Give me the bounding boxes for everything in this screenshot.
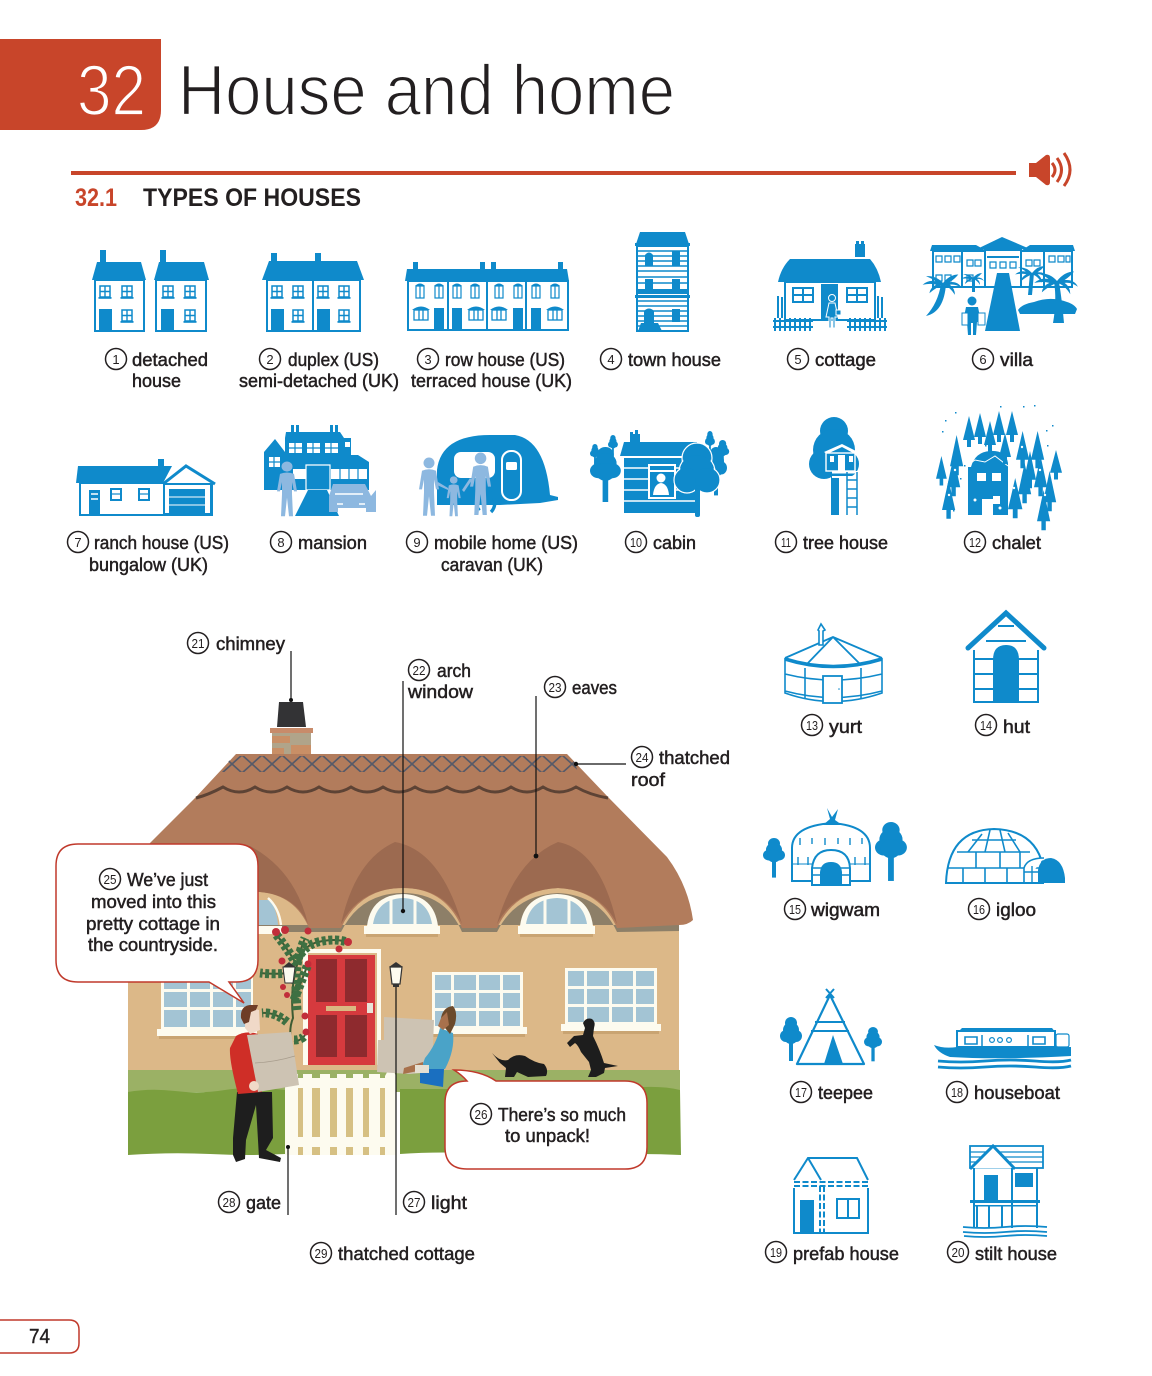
label 12: chalet <box>992 532 1041 553</box>
label 27: light <box>431 1192 467 1213</box>
label 23: 23 <box>548 680 562 695</box>
speech bubble 25: We’ve just <box>127 869 208 890</box>
label 11: tree house <box>803 532 888 553</box>
title: House and home <box>178 52 675 131</box>
label 24: thatched <box>659 747 730 768</box>
icon: stilt house <box>963 1146 1047 1237</box>
label 9: 9 <box>413 535 421 550</box>
label 7 <box>68 532 229 575</box>
speech bubble 25: 25 <box>104 872 116 887</box>
speech bubble 25: pretty cottage in <box>86 913 220 934</box>
label 14: hut <box>1003 716 1030 737</box>
section rule <box>71 171 1016 175</box>
label 11: 11 <box>781 535 791 550</box>
icon: prefab house <box>794 1158 868 1233</box>
label 19: prefab house <box>793 1243 899 1264</box>
label 2: 2 <box>266 352 274 367</box>
label 5: 5 <box>794 352 802 367</box>
label 1: detached <box>132 349 208 370</box>
label 20 <box>948 1242 1057 1264</box>
label 6: villa <box>1000 349 1034 370</box>
label 4: 4 <box>607 352 615 367</box>
icon: wigwam <box>763 808 907 885</box>
speech bubble 25: moved into this <box>91 891 216 912</box>
label 5: cottage <box>815 349 876 370</box>
label 29: thatched cottage <box>338 1243 475 1264</box>
label 17: 17 <box>795 1085 807 1100</box>
label 22: window <box>407 681 474 702</box>
man carrying box <box>230 1005 299 1162</box>
label 10: cabin <box>653 532 696 553</box>
label 1: house <box>132 370 181 391</box>
label 21 <box>188 632 286 654</box>
label 2 <box>239 348 399 391</box>
icon: mansion <box>264 425 376 516</box>
section heading: 32.1 <box>75 184 117 212</box>
icon: row house <box>405 262 569 331</box>
gate <box>285 1065 396 1155</box>
label 13: 13 <box>806 718 818 733</box>
icon: speaker <box>1029 153 1070 186</box>
label 20: stilt house <box>975 1243 1057 1264</box>
lamp right <box>389 962 403 987</box>
speech bubble 26: 26 <box>474 1107 488 1122</box>
label 20: 20 <box>952 1245 964 1260</box>
label 10 <box>626 532 696 553</box>
label 22: 22 <box>412 663 426 678</box>
label 5 <box>788 348 876 370</box>
chapter number tab <box>0 39 161 131</box>
icon: mobile home <box>419 435 558 516</box>
label 16 <box>968 898 1036 920</box>
label 24: 24 <box>636 750 648 765</box>
chapter number tab: 32 <box>77 52 146 131</box>
speech bubble 25: the countryside. <box>88 934 218 955</box>
label 16: 16 <box>973 902 985 917</box>
label 1 <box>106 348 208 391</box>
label 6 <box>972 348 1034 370</box>
label 3: row house (US) <box>445 349 565 370</box>
label 29: 29 <box>314 1246 328 1261</box>
label 1: 1 <box>112 352 120 367</box>
label 6: 6 <box>979 352 987 367</box>
section heading: TYPES OF HOUSES <box>143 184 361 212</box>
label 15: 15 <box>789 902 801 917</box>
speech bubble 26 <box>445 1070 647 1169</box>
speech bubble 25 <box>56 844 258 1003</box>
label 14 <box>976 714 1030 737</box>
label 24 <box>631 746 730 790</box>
label 7: 7 <box>74 535 82 550</box>
label 23: eaves <box>572 677 617 698</box>
label 17 <box>790 1082 873 1103</box>
icon: yurt <box>785 624 882 703</box>
label 15 <box>784 898 880 920</box>
label 21: 21 <box>192 636 204 651</box>
label 28 <box>218 1192 281 1213</box>
label 3: 3 <box>424 352 432 367</box>
chimney <box>270 702 313 755</box>
label 28: 28 <box>222 1195 236 1210</box>
label 17: teepee <box>818 1082 873 1103</box>
leader: arch window <box>401 681 405 913</box>
speech bubble 26: to unpack! <box>505 1125 590 1146</box>
label 9: mobile home (US) <box>434 532 578 553</box>
label 14: 14 <box>980 718 992 733</box>
icon: cottage <box>773 241 887 331</box>
leader: gate <box>286 1145 290 1215</box>
wall lamp left <box>283 962 295 983</box>
cottage wall <box>128 880 679 1075</box>
label 3: terraced house (UK) <box>411 370 572 391</box>
label 27: 27 <box>408 1195 420 1210</box>
label 13 <box>802 714 862 737</box>
lower windows <box>157 968 661 1039</box>
label 27 <box>404 1192 467 1213</box>
label 7: ranch house (US) <box>94 532 229 553</box>
icon: duplex <box>262 253 364 332</box>
page number tab <box>0 1320 79 1353</box>
icon: teepee <box>780 989 882 1064</box>
icon: houseboat <box>934 1028 1071 1068</box>
label 12 <box>964 532 1041 553</box>
climbing rose <box>260 926 352 1048</box>
label 4: town house <box>628 349 721 370</box>
label 18: houseboat <box>974 1082 1060 1103</box>
leader: eaves <box>534 696 538 858</box>
front door <box>303 949 381 1065</box>
icon: ranch house <box>76 459 215 515</box>
label 21: chimney <box>216 633 286 654</box>
dog jumping <box>567 1018 618 1077</box>
speech bubble 26: There’s so much <box>498 1104 626 1125</box>
icon: tree house <box>809 417 859 515</box>
leader: light <box>395 987 397 1215</box>
label 23 <box>544 676 617 698</box>
illustration: thatched cottage <box>128 702 693 1162</box>
thatched roof <box>128 754 693 932</box>
icon: villa <box>923 237 1078 335</box>
label 15: wigwam <box>810 899 880 920</box>
arch windows <box>256 894 595 937</box>
icon: hut <box>968 613 1044 702</box>
icon: town house <box>635 232 690 331</box>
label 8: mansion <box>298 532 367 553</box>
icon: chalet <box>936 405 1062 530</box>
label 10: 10 <box>630 535 642 550</box>
label 22 <box>407 660 474 702</box>
woman carrying box <box>377 1006 456 1087</box>
leader: thatched roof <box>574 762 626 766</box>
label 8: 8 <box>277 535 285 550</box>
label 8 <box>270 532 367 553</box>
label 18: 18 <box>951 1085 963 1100</box>
label 19: 19 <box>770 1245 782 1260</box>
label 2: duplex (US) <box>288 349 379 370</box>
label 13: yurt <box>829 716 862 737</box>
lawn strip <box>128 1070 680 1092</box>
label 24: roof <box>631 769 666 790</box>
page number tab: 74 <box>29 1326 50 1348</box>
label 9: caravan (UK) <box>441 554 543 575</box>
label 9 <box>406 532 578 575</box>
label 7: bungalow (UK) <box>89 554 208 575</box>
label 12: 12 <box>969 535 981 550</box>
label 22: arch <box>437 660 471 681</box>
label 28: gate <box>246 1192 281 1213</box>
dog lying <box>492 1053 547 1077</box>
leader: chimney <box>289 651 293 702</box>
icon: cabin <box>590 430 729 517</box>
icon: detached house <box>92 250 209 332</box>
label 3 <box>411 348 572 391</box>
label 2: semi-detached (UK) <box>239 370 399 391</box>
icon: igloo <box>946 829 1065 883</box>
hedge <box>128 1087 681 1156</box>
label 16: igloo <box>996 899 1036 920</box>
